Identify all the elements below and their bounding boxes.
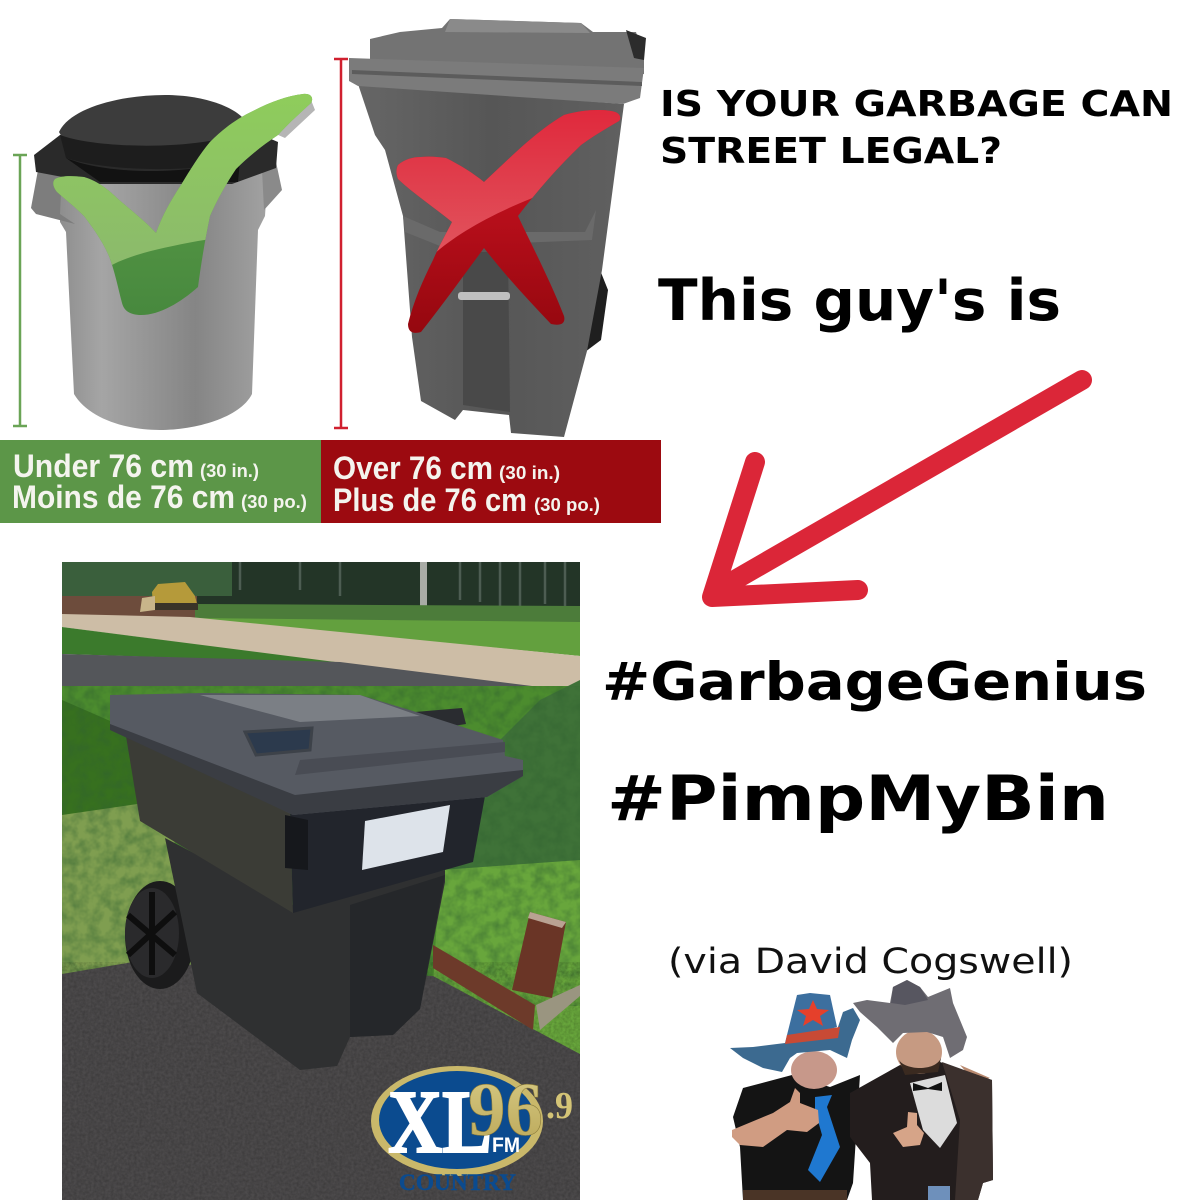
text: hashtag pimp my bin: #PimpMyBin xyxy=(607,762,1109,835)
text: this guy's is: This guy's is xyxy=(658,268,1061,334)
heading: is your garbage can street legal: IS YOUR GARBAGE CAN xyxy=(660,84,1173,125)
photo: wooden edging xyxy=(433,912,580,1030)
photo: black wheeled bin xyxy=(110,693,523,1070)
label band: under 76 cm xyxy=(0,440,321,523)
label band: over 76 cm: (30 in.) xyxy=(499,463,560,483)
logo: XL 96.9 FM Country: COUNTRY xyxy=(399,1170,516,1195)
person: left host in blue hat xyxy=(730,993,860,1200)
logo: XL 96.9 FM Country: .9 xyxy=(546,1085,573,1127)
photo: asphalt driveway xyxy=(62,962,580,1200)
photo background: trees and lawn xyxy=(62,562,580,1066)
label band: over 76 cm xyxy=(321,440,661,523)
panel: bin photo xyxy=(62,562,580,1200)
panel: can height comparison xyxy=(0,19,661,523)
heading: is your garbage can street legal xyxy=(660,84,1173,172)
icon: green check mark xyxy=(53,94,315,315)
icon: legal round garbage can xyxy=(31,95,282,430)
arrow pointing to the photo xyxy=(712,380,1082,597)
label band: over 76 cm: Plus de 76 cm xyxy=(333,482,527,518)
heading: is your garbage can street legal: STREET LEGAL? xyxy=(660,131,1002,172)
logo: XL 96.9 FM Country: XL xyxy=(388,1073,492,1172)
icon: illegal wheeled bin xyxy=(349,19,646,437)
label band: under 76 cm: (30 po.) xyxy=(241,492,307,512)
logo: XL 96.9 FM Country: FM xyxy=(492,1134,520,1157)
logo: XL 96.9 FM Country: 96 xyxy=(468,1068,543,1152)
label band: over 76 cm: (30 po.) xyxy=(534,495,600,515)
label band: over 76 cm: Over 76 cm xyxy=(333,450,493,486)
label band: under 76 cm: Under 76 cm xyxy=(13,448,194,484)
logo: XL 96.9 FM Country xyxy=(371,1066,573,1195)
red height ruler xyxy=(334,59,348,428)
label band: under 76 cm: Moins de 76 cm xyxy=(12,479,235,515)
person: right host in grey hat xyxy=(850,980,993,1200)
photo: bulldozer in the distance xyxy=(140,582,198,612)
text: credit via David Cogswell: (via David Cogswell) xyxy=(668,942,1073,982)
label band: under 76 cm: (30 in.) xyxy=(200,461,259,481)
photo: two radio hosts in oversized cowboy hats xyxy=(730,980,993,1200)
icon: red X mark xyxy=(396,110,620,333)
green height ruler xyxy=(13,155,27,426)
text: hashtag garbage genius: #GarbageGenius xyxy=(602,652,1147,713)
